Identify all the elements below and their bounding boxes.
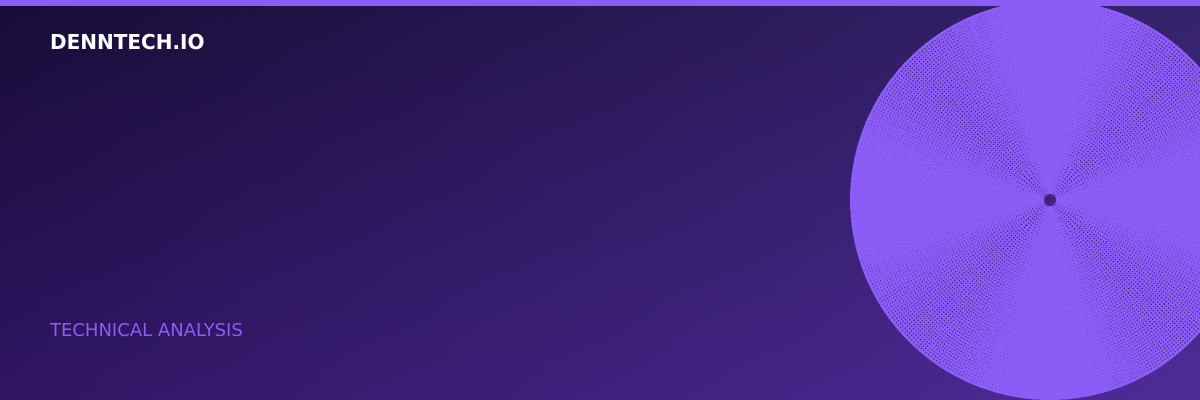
- brand name: DENNTECH.IO: [50, 30, 205, 54]
- category label: TECHNICAL ANALYSIS: [50, 320, 243, 341]
- circular moire disc: [850, 6, 1200, 400]
- disc centre dot: [1044, 194, 1056, 206]
- top accent bar: [0, 0, 1200, 6]
